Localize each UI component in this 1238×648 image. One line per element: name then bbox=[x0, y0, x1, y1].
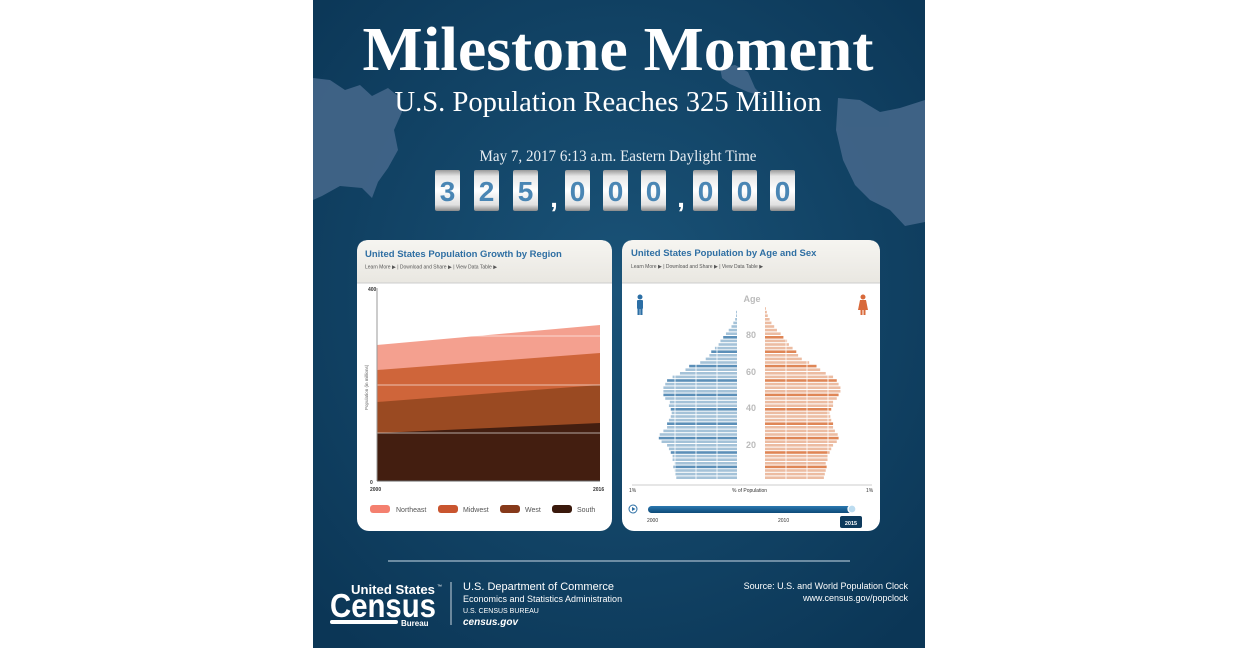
pyramid: Age bbox=[743, 294, 761, 304]
pyramid: 80 bbox=[746, 330, 756, 340]
pyramid: 1% bbox=[866, 488, 874, 494]
legend: South bbox=[577, 507, 595, 514]
counter: 3 bbox=[440, 176, 455, 207]
area chart: 2000 bbox=[370, 487, 381, 493]
logo: Census: ™ bbox=[437, 584, 442, 590]
background panel bbox=[313, 0, 925, 648]
title: Milestone Moment bbox=[362, 16, 874, 84]
map silhouettes bbox=[313, 65, 925, 226]
footer agency text: U.S. CENSUS BUREAU bbox=[463, 608, 539, 615]
icon: female bbox=[858, 294, 868, 315]
pyramid: % of Population bbox=[732, 488, 767, 494]
counter: 0 bbox=[608, 176, 623, 207]
counter: 0 bbox=[646, 176, 661, 207]
time slider: 2010 bbox=[778, 518, 789, 524]
date: May 7, 2017 6:13 a.m. Eastern Daylight Time bbox=[480, 148, 757, 165]
time slider: 2000 bbox=[647, 518, 658, 524]
pyramid: 40 bbox=[746, 403, 756, 413]
legend bbox=[370, 505, 595, 514]
logo: Census: United States bbox=[351, 582, 435, 597]
pyramid: 60 bbox=[746, 367, 756, 377]
area chart: 0 bbox=[370, 480, 373, 486]
subtitle: U.S. Population Reaches 325 Million bbox=[394, 87, 822, 118]
counter: 0 bbox=[737, 176, 752, 207]
panel: age and sex: Learn More ▶ | Download and Share ▶ | View Data Table ▶ bbox=[631, 264, 763, 270]
counter: , bbox=[550, 182, 558, 213]
panel: age and sex bbox=[622, 240, 880, 531]
time slider bbox=[629, 505, 862, 528]
counter: 0 bbox=[570, 176, 585, 207]
footer agency text: U.S. Department of Commerce bbox=[463, 581, 614, 593]
area chart: Population (in millions) bbox=[364, 364, 369, 410]
counter: 2 bbox=[479, 176, 494, 207]
logo: Census: Bureau bbox=[401, 619, 429, 628]
pyramid: 1% bbox=[629, 488, 637, 494]
panel: growth by region bbox=[357, 240, 612, 531]
source: www.census.gov/popclock bbox=[802, 593, 908, 603]
legend: West bbox=[525, 507, 541, 514]
area chart: 2016 bbox=[593, 487, 604, 493]
pyramid bbox=[629, 294, 874, 494]
panel: age and sex: United States Population by Age and Sex bbox=[631, 248, 817, 259]
legend: Midwest bbox=[463, 507, 489, 514]
time slider: 2015 bbox=[845, 521, 857, 527]
area chart: 400 bbox=[368, 287, 377, 293]
panel: growth by region: Learn More ▶ | Download and Share ▶ | View Data Table ▶ bbox=[365, 264, 497, 270]
pyramid: 20 bbox=[746, 440, 756, 450]
legend: Northeast bbox=[396, 507, 426, 514]
footer agency text bbox=[463, 581, 622, 628]
counter: 0 bbox=[775, 176, 790, 207]
footer agency text: census.gov bbox=[463, 617, 519, 628]
icon: male bbox=[637, 294, 643, 315]
logo: Census: Census bbox=[330, 587, 436, 624]
counter bbox=[435, 170, 795, 213]
area chart bbox=[364, 287, 604, 493]
source bbox=[744, 581, 908, 603]
source: Source: U.S. and World Population Clock bbox=[744, 581, 908, 591]
counter: 5 bbox=[518, 176, 533, 207]
divider bbox=[388, 560, 850, 562]
footer agency text: Economics and Statistics Administration bbox=[463, 594, 622, 604]
counter: , bbox=[677, 182, 685, 213]
counter: 0 bbox=[698, 176, 713, 207]
panel: growth by region: United States Population Growth by Region bbox=[365, 249, 562, 260]
